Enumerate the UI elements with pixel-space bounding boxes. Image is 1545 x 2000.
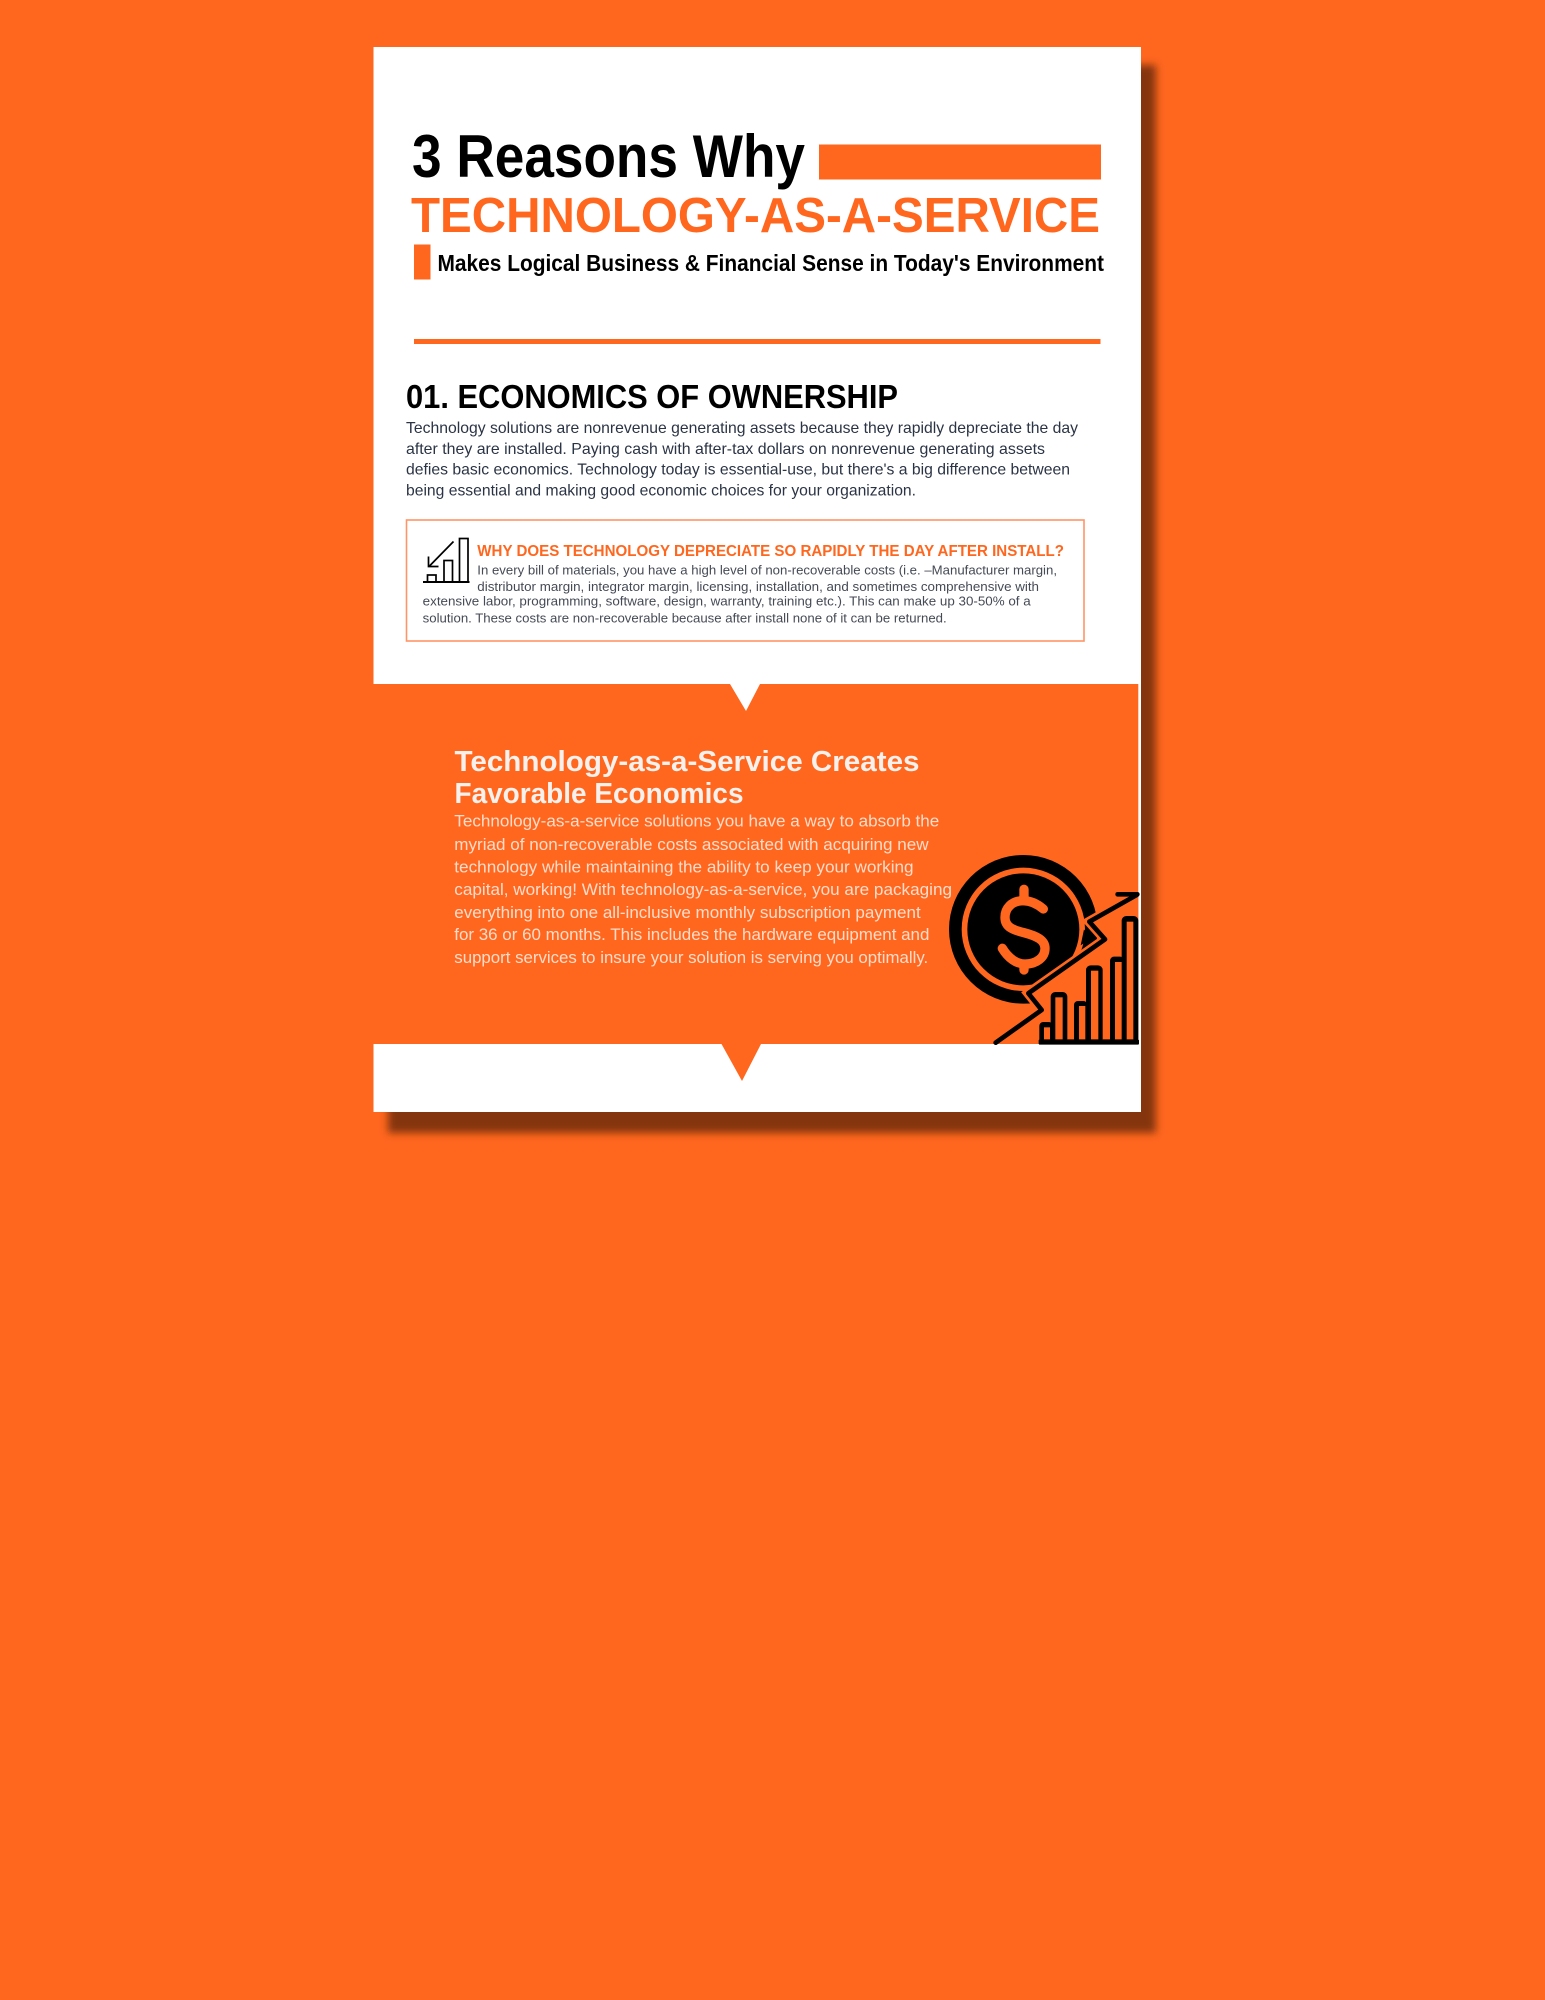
callout box xyxy=(406,520,1084,641)
callout body text: In every bill of materials, you have a high level of non-recoverable costs (i.e. –Manufacturer margin, xyxy=(477,564,1057,578)
band heading xyxy=(454,746,920,810)
orange divider rule xyxy=(414,339,1100,344)
title line: 3 Reasons Why: 3 Reasons Why xyxy=(412,123,806,190)
title line: Technology-as-a-Service: TECHNOLOGY-AS-A-SERVICE xyxy=(411,189,1100,243)
card drop shadow xyxy=(388,65,1156,1133)
icon: dollar coin with rising chart xyxy=(949,855,1139,1045)
section heading: economics of ownership: 01. ECONOMICS OF OWNERSHIP xyxy=(406,378,898,415)
band body text: technology while maintaining the ability to keep your working xyxy=(454,858,914,876)
intro paragraph: Technology solutions are nonrevenue generating assets because they rapidly depreciate the day xyxy=(406,420,1078,437)
band body text: for 36 or 60 months. This includes the hardware equipment and xyxy=(454,926,929,944)
callout body text xyxy=(423,564,1057,626)
subtitle: Makes Logical Business & Financial Sense in Today's Environment xyxy=(438,250,1104,276)
callout body text: solution. These costs are non-recoverable because after install none of it can be returned. xyxy=(423,612,947,626)
orange title bar xyxy=(819,144,1101,180)
panel: white card xyxy=(374,47,1141,1112)
band body text xyxy=(454,812,952,967)
title block xyxy=(411,123,1104,280)
panel: orange band xyxy=(374,684,1139,1081)
callout body text: distributor margin, integrator margin, licensing, installation, and sometimes comprehensive with xyxy=(477,580,1039,594)
band body text: support services to insure your solution is serving you optimally. xyxy=(454,949,928,967)
intro paragraph xyxy=(406,420,1078,500)
intro paragraph: after they are installed. Paying cash with after-tax dollars on nonrevenue generating assets xyxy=(406,441,1045,458)
band body text: Technology-as-a-service solutions you have a way to absorb the xyxy=(454,812,939,830)
band heading: Technology-as-a-Service Creates xyxy=(454,746,920,778)
intro paragraph: being essential and making good economic choices for your organization. xyxy=(406,482,916,500)
intro paragraph: defies basic economics. Technology today is essential-use, but there's a big difference between xyxy=(406,462,1070,478)
orange subtitle marker xyxy=(414,244,430,280)
band heading: Favorable Economics xyxy=(454,778,744,810)
band body text: capital, working! With technology-as-a-service, you are packaging xyxy=(454,881,952,899)
band body text: myriad of non-recoverable costs associated with acquiring new xyxy=(454,836,929,854)
icon: declining bar chart xyxy=(423,538,470,582)
callout body text: extensive labor, programming, software, design, warranty, training etc.). This can make up 30-50% of a xyxy=(423,594,1031,608)
callout heading: WHY DOES TECHNOLOGY DEPRECIATE SO RAPIDLY THE DAY AFTER INSTALL? xyxy=(477,543,1064,560)
band body text: everything into one all-inclusive monthly subscription payment xyxy=(454,904,921,922)
